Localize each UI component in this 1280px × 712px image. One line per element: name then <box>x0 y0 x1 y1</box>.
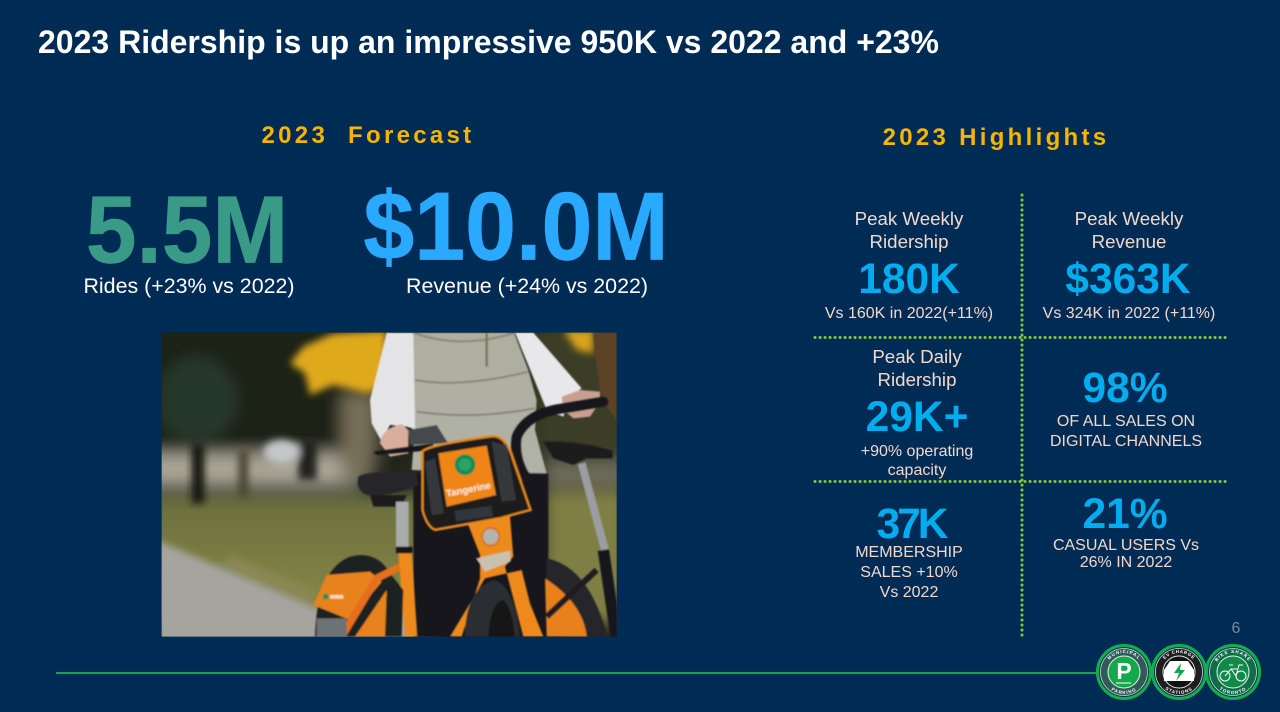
cell label line two: Revenue <box>1092 231 1166 252</box>
metric: rides value: 5.5M <box>86 177 288 284</box>
description: OF ALL SALES ON <box>1057 413 1195 430</box>
photo: person with orange bike share bike <box>162 332 617 637</box>
description line two: SALES +10% <box>860 564 958 581</box>
footer line <box>56 672 1106 674</box>
heading: 2023 Highlights: 2023 Highlights <box>883 124 1109 151</box>
icon: municipal parking badge: P <box>1116 658 1132 684</box>
description: CASUAL USERS Vs <box>1053 537 1199 554</box>
icon: municipal parking badge <box>1096 644 1152 700</box>
title: 2023 Ridership is up an impressive 950K vs 2022 and +23% <box>38 24 939 60</box>
capacity note line two: capacity <box>888 462 946 479</box>
metric: rides caption: Rides (+23% vs 2022) <box>83 274 295 298</box>
description line two: DIGITAL CHANNELS <box>1050 433 1202 450</box>
cell label line two: Ridership <box>878 369 956 390</box>
cell label: Peak Daily <box>872 346 962 367</box>
description line three: Vs 2022 <box>880 584 938 601</box>
cell label: Peak Weekly <box>1075 208 1183 229</box>
cell: peak daily ridership <box>861 346 973 479</box>
metric: revenue value: $10.0M <box>363 173 669 281</box>
icon: EV charge stations badge: STATIONS <box>1166 687 1192 694</box>
cell: digital sales <box>1050 365 1202 450</box>
front panel <box>422 436 531 530</box>
icon: municipal parking badge: MUNICIPAL <box>1107 650 1140 660</box>
cell: peak weekly ridership <box>825 208 993 322</box>
capacity note: +90% operating <box>861 443 973 460</box>
value: 21% <box>1082 491 1168 538</box>
page number: 6 <box>1232 620 1240 637</box>
heading: 2023 Forecast: 2023 Forecast <box>262 122 474 149</box>
person <box>370 333 617 640</box>
cell label: Peak Weekly <box>855 208 963 229</box>
frame <box>450 517 543 637</box>
icon: municipal parking badge: PARKING <box>1111 687 1136 694</box>
cell: peak weekly revenue <box>1042 208 1215 322</box>
comparison: Vs 160K in 2022(+11%) <box>825 305 993 322</box>
cell: membership sales <box>855 501 963 601</box>
icon: bike share Toronto badge <box>1206 644 1261 700</box>
icon: EV charge stations badge: EV CHARGE <box>1162 650 1195 660</box>
cell: casual users <box>1053 491 1199 571</box>
comparison: Vs 324K in 2022 (+11%) <box>1043 305 1215 322</box>
metric: revenue caption: Revenue (+24% vs 2022) <box>406 274 648 298</box>
bikes: Tangerine <box>445 480 493 500</box>
cell label line two: Ridership <box>870 231 948 252</box>
icon: EV charge stations badge <box>1152 644 1206 700</box>
description: MEMBERSHIP <box>855 544 963 561</box>
value: $363K <box>1065 256 1191 303</box>
bikes <box>313 402 617 640</box>
value: 180K <box>858 256 960 303</box>
value: 98% <box>1082 365 1168 412</box>
value: 37K <box>877 501 945 548</box>
description line two: 26% IN 2022 <box>1080 554 1172 571</box>
icon: bike share Toronto badge: BIKE SHARE <box>1214 650 1251 662</box>
value: 29K+ <box>866 394 968 441</box>
icon: bike share Toronto badge: TORONTO <box>1220 686 1246 694</box>
